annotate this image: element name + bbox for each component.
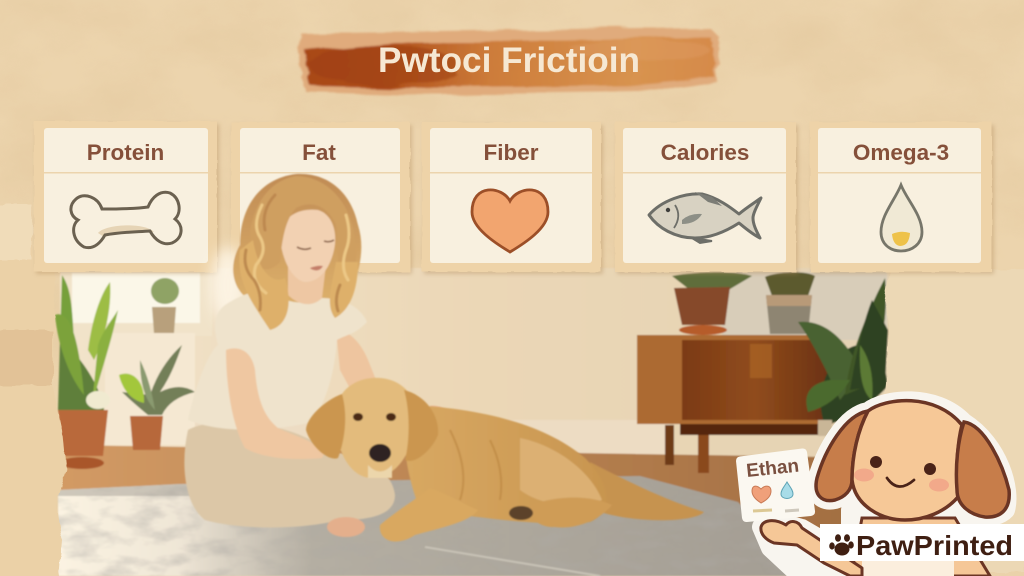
dog body bbox=[405, 405, 607, 524]
grey pot with plant bbox=[765, 272, 815, 334]
mascot body bbox=[851, 518, 990, 576]
panel: calories bbox=[615, 122, 798, 274]
icon: oil drop bbox=[881, 185, 922, 251]
panel: omega-3 bbox=[810, 122, 994, 274]
right torn paper edge bbox=[860, 268, 1024, 576]
hand on dog bbox=[430, 406, 460, 432]
mascot right ear bbox=[956, 422, 1009, 517]
window bbox=[62, 270, 212, 445]
card name: Ethan bbox=[745, 456, 800, 482]
grey wall behind plants bbox=[722, 272, 887, 340]
woman bbox=[184, 174, 460, 537]
heading: omega-3: Omega-3 bbox=[853, 140, 949, 165]
dog ears bbox=[306, 394, 345, 459]
mascot sticker bbox=[736, 400, 1024, 576]
mascot face bbox=[854, 456, 949, 492]
brand text: PawPrinted bbox=[856, 530, 1013, 561]
hair back bbox=[233, 174, 361, 324]
mascot arm and hand bbox=[761, 521, 862, 576]
name card bbox=[736, 448, 815, 522]
mascot left ear bbox=[816, 411, 868, 501]
mascot head bbox=[852, 401, 962, 520]
icon: bone bbox=[71, 192, 181, 248]
left plant in pot bbox=[55, 275, 118, 469]
window plant bbox=[151, 278, 179, 333]
near arm bbox=[226, 348, 325, 459]
heading: fat: Fat bbox=[302, 140, 336, 165]
golden retriever bbox=[306, 378, 704, 542]
brush stroke bbox=[300, 28, 720, 95]
hair front locks bbox=[250, 176, 356, 290]
panel: protein bbox=[34, 121, 219, 274]
face bbox=[280, 210, 335, 282]
title banner bbox=[300, 28, 720, 95]
heading: fiber: Fiber bbox=[483, 140, 539, 165]
icon: fish bbox=[649, 192, 761, 243]
room wall bbox=[60, 268, 890, 460]
dog tail bbox=[590, 462, 704, 520]
trousers bbox=[184, 422, 395, 528]
credenza bbox=[637, 335, 833, 473]
floor bbox=[60, 445, 890, 576]
panel: fat bbox=[231, 122, 412, 274]
icon: heart bbox=[472, 190, 548, 252]
sticker silhouette bbox=[761, 400, 1007, 576]
baseboard bbox=[190, 420, 670, 458]
dog rear paw bbox=[530, 498, 612, 528]
panel: fiber bbox=[422, 122, 603, 274]
rug bbox=[58, 476, 808, 576]
dog front leg and paw bbox=[380, 488, 478, 542]
foot bbox=[327, 517, 365, 537]
room scene bbox=[55, 268, 890, 576]
mascot belly bbox=[862, 555, 954, 576]
far arm bbox=[336, 330, 378, 392]
title text: Pwtoci Frictioin bbox=[378, 41, 640, 80]
hair curls bbox=[245, 195, 349, 311]
light halo bbox=[210, 247, 246, 323]
heading: calories: Calories bbox=[661, 140, 749, 165]
PawPrinted logo bbox=[820, 524, 1024, 561]
left torn paper edge bbox=[0, 205, 66, 576]
eyes and mouth bbox=[297, 240, 334, 249]
second plant in pot bbox=[119, 345, 195, 450]
heading: protein: Protein bbox=[87, 140, 164, 165]
terracotta pot with plant bbox=[672, 272, 752, 335]
card icons bbox=[752, 482, 799, 511]
neck bbox=[288, 265, 326, 304]
dog eyes and nose bbox=[353, 413, 363, 421]
icon: paw bbox=[829, 534, 854, 556]
shirt bbox=[188, 290, 367, 430]
large green plant bbox=[798, 278, 888, 436]
dog head bbox=[335, 378, 417, 478]
